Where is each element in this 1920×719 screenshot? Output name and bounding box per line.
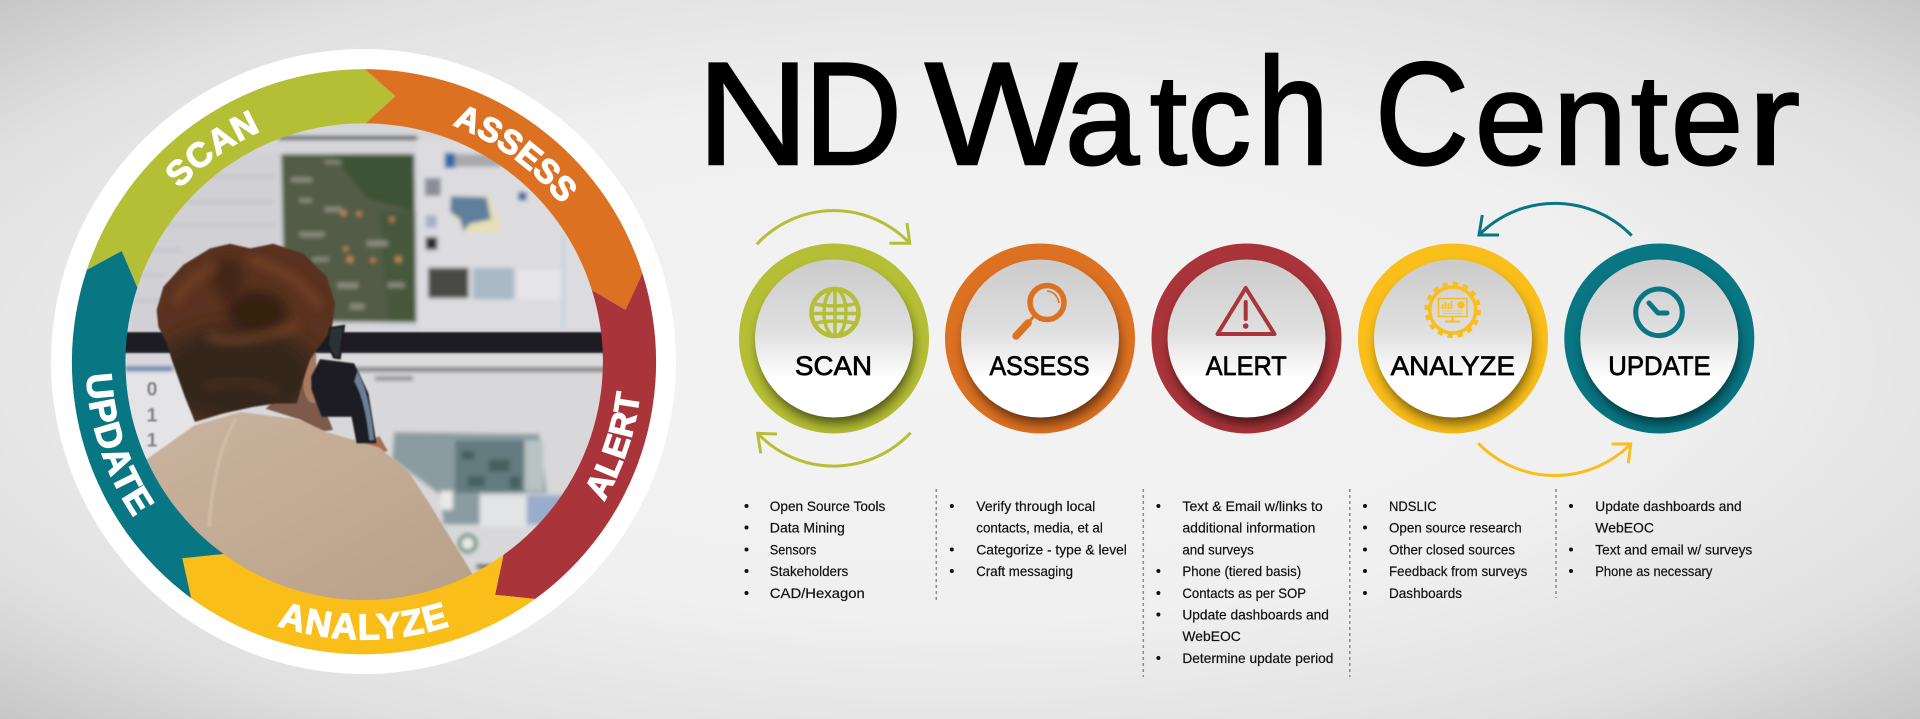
ring segment: assess <box>365 69 642 310</box>
lower monitor <box>126 352 603 571</box>
label: assess: ASSESS <box>990 351 1090 381</box>
label: update: UPDATE <box>1608 351 1711 381</box>
title: C <box>1375 32 1469 195</box>
sweater seam <box>209 419 236 527</box>
on-screen figures: 1 <box>147 430 158 452</box>
on-screen figures: 0 <box>147 378 157 400</box>
phone hand <box>364 436 388 452</box>
bullet list: assess: contacts, media, et al <box>976 520 1103 536</box>
step: update <box>1479 203 1754 434</box>
bullet list: alert <box>1156 498 1333 666</box>
bullet list: scan: Open Source Tools <box>770 498 885 514</box>
ring label: scan: SCAN <box>166 110 260 186</box>
ring label: alert: ALERT <box>587 390 640 502</box>
bullet list: analyze <box>1363 498 1527 601</box>
bullet list: update: Update dashboards and <box>1595 498 1742 514</box>
arrow: scan top <box>757 211 910 244</box>
icon: gear with monitor <box>1427 284 1479 336</box>
bullet list: alert: Phone (tiered basis) <box>1182 563 1301 579</box>
bullet list: assess: Craft messaging <box>976 563 1073 579</box>
title: W <box>925 32 1077 195</box>
label: analyze: ANALYZE <box>1391 351 1515 381</box>
arrow: analyze to update <box>1478 443 1631 476</box>
bullet list: analyze: Dashboards <box>1389 585 1462 601</box>
white wheel backing <box>51 49 676 674</box>
circle: assess <box>945 244 1135 434</box>
ring segment: scan <box>87 69 395 288</box>
circle: alert <box>1152 244 1342 434</box>
title: N <box>697 32 809 195</box>
label: alert: ALERT <box>1206 351 1287 381</box>
title <box>697 27 1800 197</box>
on-screen figures <box>147 378 158 452</box>
title: h <box>1257 27 1329 197</box>
title: c <box>1188 45 1251 192</box>
bullet list: assess: Categorize - type & level <box>976 542 1127 558</box>
upper monitor <box>136 134 562 325</box>
bullet list: alert: Determine update period <box>1182 650 1333 666</box>
icon: globe <box>812 289 858 336</box>
step: analyze <box>1358 244 1631 476</box>
bullet list: scan: Stakeholders <box>770 563 848 579</box>
ring segment: update <box>72 251 224 598</box>
ring label: analyze: ANALYZE <box>277 602 449 640</box>
map on upper monitor <box>281 154 416 323</box>
monitor bezel <box>114 332 619 353</box>
bullet list: assess <box>950 498 1127 579</box>
ring segment: alert <box>495 273 656 599</box>
circle: scan <box>739 244 929 434</box>
photo: operator on phone at monitors <box>126 122 603 600</box>
ring label: assess: ASSESS <box>452 106 576 202</box>
bullet list: alert: Contacts as per SOP <box>1182 585 1306 601</box>
title: a <box>1065 45 1139 192</box>
neck and ear <box>266 367 333 432</box>
circle: analyze <box>1358 244 1548 434</box>
ear <box>303 352 316 403</box>
hair lower shadow <box>152 327 320 424</box>
step: assess <box>945 244 1135 434</box>
wheel artwork <box>72 69 656 654</box>
step: scan <box>739 211 929 466</box>
title: n <box>1553 45 1627 192</box>
ring segment: analyze <box>182 554 535 654</box>
title: t <box>1631 49 1668 192</box>
hair highlights <box>175 259 320 340</box>
on-screen figures: 1 <box>147 404 158 426</box>
title: r <box>1748 45 1800 192</box>
bullet list: assess: Verify through local <box>976 498 1095 514</box>
label: scan: SCAN <box>795 351 872 381</box>
bullet list: scan <box>744 498 885 601</box>
ring label: update: UPDATE <box>86 374 155 518</box>
phone highlight <box>354 371 374 440</box>
arrow: update to analyze <box>1479 203 1632 236</box>
bullet list: update: WebEOC <box>1595 520 1654 536</box>
glasses <box>328 326 344 358</box>
title: e <box>1475 45 1547 192</box>
title: t <box>1150 49 1187 192</box>
icon: warning triangle <box>1218 288 1274 334</box>
icon: magnifying glass <box>1016 286 1064 336</box>
title: D <box>804 32 902 195</box>
cycle wheel with photo <box>51 49 676 674</box>
bullet list: update: Phone as necessary <box>1595 563 1712 579</box>
title: e <box>1671 45 1743 192</box>
phone handset <box>311 359 376 443</box>
arrow: scan bottom <box>758 433 911 466</box>
step: alert <box>1152 244 1342 434</box>
bullet list: analyze: Feedback from surveys <box>1389 563 1527 579</box>
circle: update <box>1564 244 1754 434</box>
bullet list: update <box>1569 498 1752 579</box>
bullet list: scan: CAD/Hexagon <box>770 585 865 601</box>
bullet list: analyze: Other closed sources <box>1389 542 1515 558</box>
bullet list: alert: Text & Email w/links to <box>1182 498 1323 514</box>
icon: clock <box>1636 289 1682 336</box>
bullet list: alert: Update dashboards and <box>1182 606 1329 622</box>
sweater <box>146 412 473 600</box>
bullet list: alert: additional information <box>1182 520 1315 536</box>
bullet list: scan: Data Mining <box>770 520 845 536</box>
bullet list: alert: and surveys <box>1182 542 1254 558</box>
bullet list: update: Text and email w/ surveys <box>1595 542 1752 558</box>
bullet list: alert: WebEOC <box>1182 628 1241 644</box>
bullet list: analyze: NDSLIC <box>1389 498 1437 514</box>
bullet list: analyze: Open source research <box>1389 520 1522 536</box>
bullet list: scan: Sensors <box>770 542 816 558</box>
hair <box>152 244 335 424</box>
hair swirl <box>228 291 287 333</box>
